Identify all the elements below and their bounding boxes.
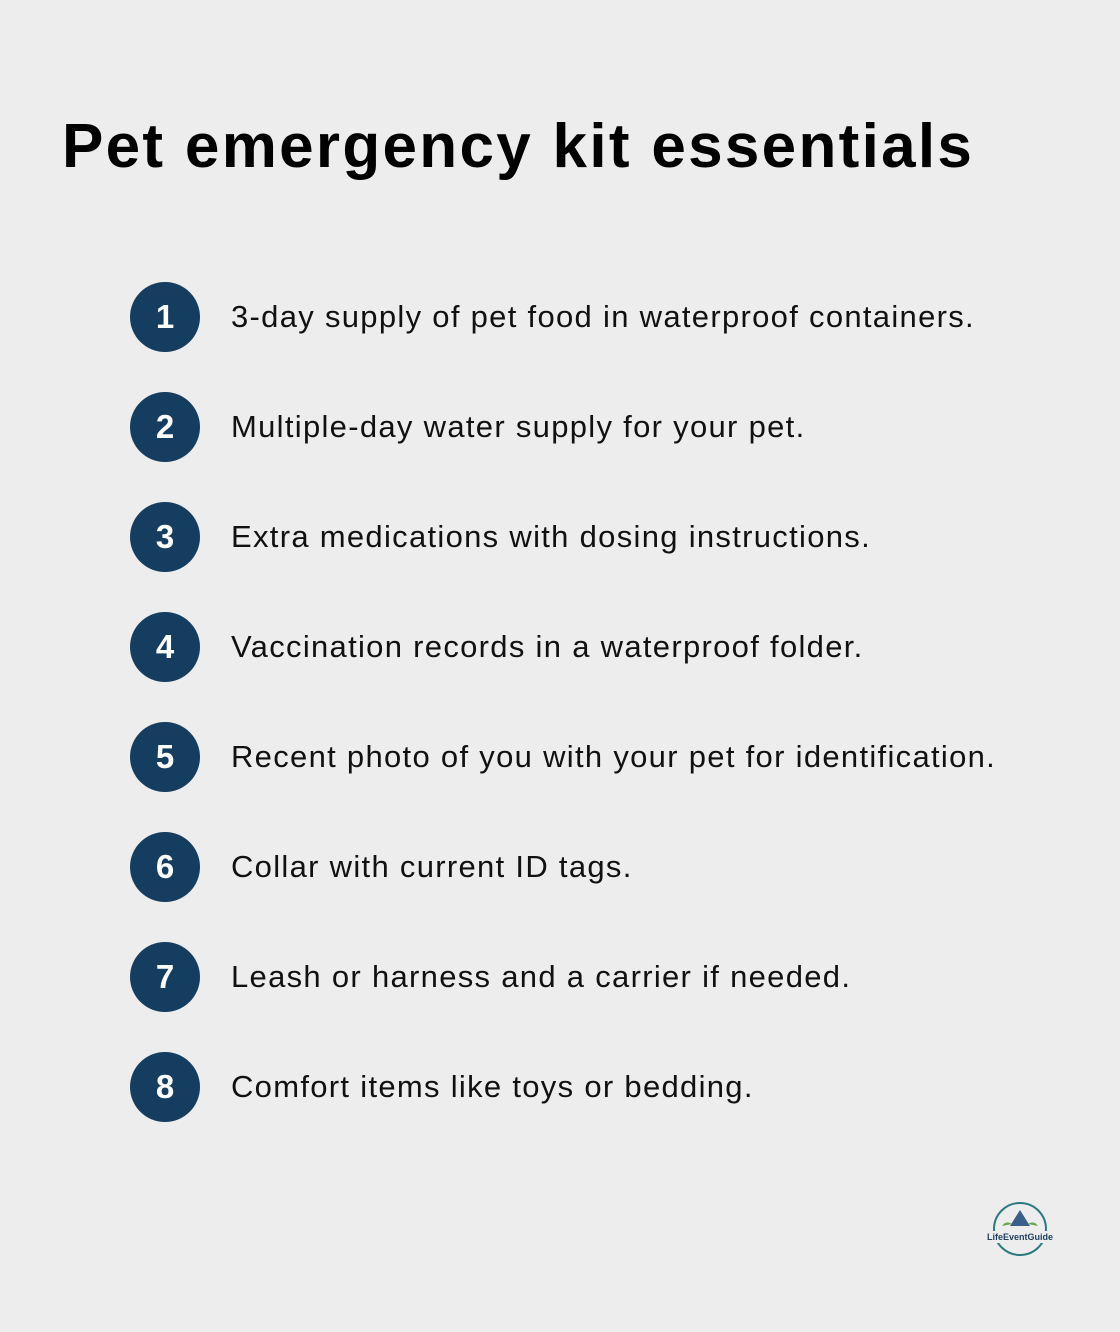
item 4: Vaccination records in a waterproof folder. xyxy=(231,629,864,664)
item 1: 3-day supply of pet food in waterproof containers. xyxy=(231,299,975,334)
item 6: Collar with current ID tags. xyxy=(231,849,633,884)
item 8: Comfort items like toys or bedding. xyxy=(231,1069,754,1104)
item 7 xyxy=(130,942,851,1012)
item 5 xyxy=(130,722,996,792)
item 6: 6 xyxy=(156,848,174,885)
item 2 xyxy=(130,392,806,462)
item 8: 8 xyxy=(156,1068,174,1105)
title: Pet emergency kit essentials xyxy=(62,112,974,181)
item 2: Multiple-day water supply for your pet. xyxy=(231,409,806,444)
item 4 xyxy=(130,612,864,682)
item 1: 1 xyxy=(156,298,174,335)
logo xyxy=(987,1202,1053,1256)
item 7: Leash or harness and a carrier if needed. xyxy=(231,959,851,994)
item 5: 5 xyxy=(156,738,174,775)
item 1 xyxy=(130,282,975,352)
item 2: 2 xyxy=(156,408,174,445)
item 3: Extra medications with dosing instructions. xyxy=(231,519,871,554)
item 7: 7 xyxy=(156,958,174,995)
item 5: Recent photo of you with your pet for identification. xyxy=(231,739,996,774)
item 3: 3 xyxy=(156,518,174,555)
logo: LifeEventGuide xyxy=(987,1232,1053,1242)
item 8 xyxy=(130,1052,754,1122)
item 3 xyxy=(130,502,871,572)
item 6 xyxy=(130,832,633,902)
item 4: 4 xyxy=(156,628,174,665)
